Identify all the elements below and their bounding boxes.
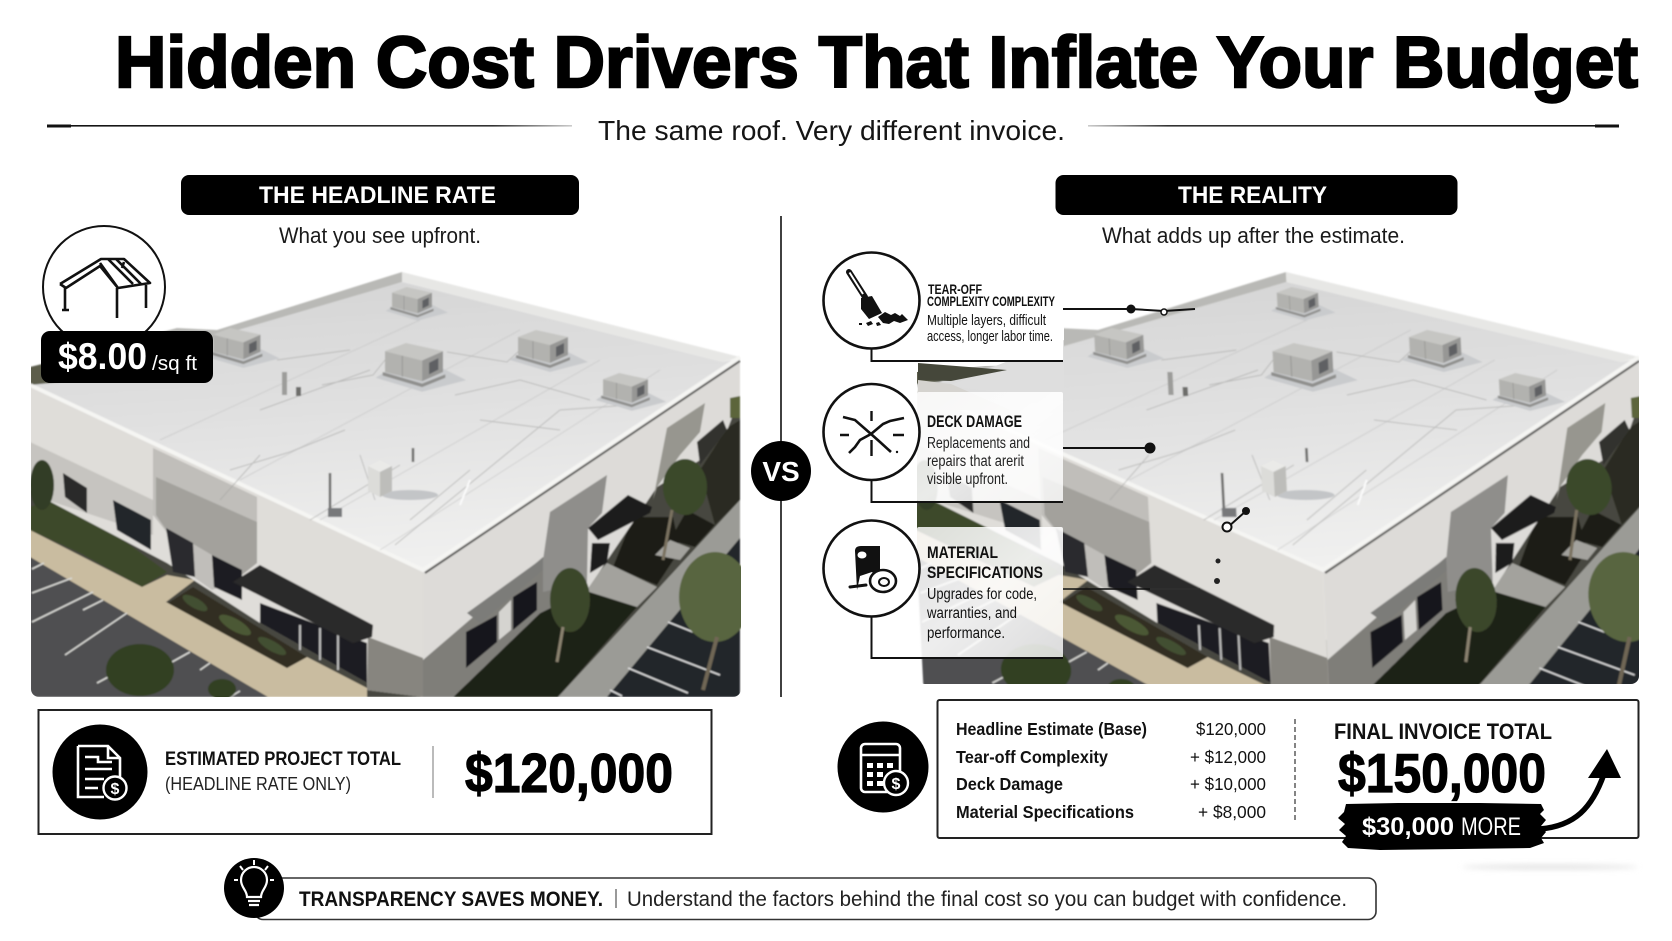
takeaway bar	[224, 858, 1376, 920]
price badge: $8.00 per sq ft	[41, 331, 213, 383]
text: material specifications: performance.	[927, 625, 1005, 642]
text: material specifications	[926, 543, 1043, 642]
text: deck damage: DECK DAMAGE	[927, 413, 1022, 431]
icon: invoice document	[52, 724, 148, 820]
cost breakdown table: Deck Damage	[956, 774, 1063, 794]
panel: the reality	[824, 175, 1668, 850]
heading pill: the headline rate: THE HEADLINE RATE	[259, 182, 496, 209]
cost breakdown table: $120,000	[1196, 719, 1266, 739]
summary box: estimated project total: ESTIMATED PROJECT TOTAL	[165, 748, 401, 770]
icon: invoice document: $	[111, 781, 120, 798]
heading pill: the reality	[1056, 175, 1458, 215]
badge: $30,000 more: $30,000	[1362, 813, 1454, 841]
summary box: estimated project total	[38, 710, 712, 834]
icon: calculator: $	[892, 776, 901, 793]
text: tear-off complexity: COMPLEXITY COMPLEXITY	[927, 293, 1055, 309]
text: tear-off complexity: Multiple layers, difficult	[927, 313, 1046, 329]
subtitle with rules: The same roof. Very different invoice.	[598, 115, 1065, 146]
cost breakdown table: Material Specifications	[956, 802, 1134, 822]
cost breakdown table: + $12,000	[1190, 747, 1266, 767]
cost breakdown table: Headline Estimate (Base)	[956, 719, 1147, 739]
cost breakdown table: + $8,000	[1198, 802, 1266, 822]
photo: building roof, headline side	[30, 272, 751, 699]
cost breakdown table	[956, 719, 1266, 822]
text: deck damage: visible upfront.	[927, 471, 1008, 488]
heading pill: the headline rate	[181, 175, 579, 215]
cost breakdown table: + $10,000	[1190, 774, 1266, 794]
text: tear-off complexity: access, longer labor time.	[927, 329, 1053, 345]
versus divider: VS	[762, 456, 800, 487]
text: material specifications: SPECIFICATIONS	[927, 563, 1043, 582]
caption: what adds up: What adds up after the estimate.	[1102, 223, 1405, 248]
callout: deck damage	[824, 384, 1156, 502]
faint smudge	[1462, 865, 1638, 869]
price badge: $8.00 per sq ft: $8.00	[58, 336, 147, 377]
arrow up	[1540, 749, 1621, 829]
panel: the headline rate	[30, 175, 751, 834]
caption: what you see upfront: What you see upfront.	[279, 223, 481, 248]
summary box: final invoice: FINAL INVOICE TOTAL	[1334, 719, 1552, 744]
photo: building roof, reality side	[902, 272, 1668, 699]
takeaway bar: Understand the factors behind the final cost so you can budget with confidence.	[627, 888, 1347, 911]
cost breakdown table: Tear-off Complexity	[956, 747, 1108, 767]
subtitle with rules	[47, 115, 1619, 146]
versus divider	[751, 216, 811, 697]
callout: tear-off complexity	[824, 252, 1195, 361]
price badge: $8.00 per sq ft: /sq ft	[152, 353, 197, 375]
text: deck damage	[927, 413, 1030, 488]
summary box: final invoice	[938, 700, 1638, 850]
heading pill: the reality: THE REALITY	[1178, 182, 1327, 209]
text: material specifications: Upgrades for code,	[927, 586, 1037, 603]
icon: shovel in circle	[824, 252, 920, 348]
callout markers on roof	[1214, 507, 1250, 584]
icon: roof in circle	[43, 226, 165, 348]
text: material specifications: warranties, and	[926, 605, 1017, 622]
summary box: estimated project total: (HEADLINE RATE ONLY)	[165, 773, 351, 794]
summary box: estimated project total: $120,000	[465, 742, 673, 804]
badge: $30,000 more	[1338, 803, 1546, 850]
summary box: final invoice: $150,000	[1338, 742, 1546, 804]
icon: light bulb	[224, 858, 284, 918]
title: Hidden Cost Drivers That Inflate Your Budget	[115, 23, 1638, 103]
icon: calculator	[838, 722, 928, 812]
icon: cracked deck in circle	[824, 384, 920, 480]
callout: material specifications	[824, 520, 1200, 658]
takeaway bar: TRANSPARENCY SAVES MONEY.	[299, 888, 603, 911]
text: tear-off complexity	[927, 281, 1055, 345]
text: tear-off complexity: TEAR-OFF	[928, 281, 982, 297]
badge: $30,000 more: MORE	[1461, 813, 1521, 841]
text: deck damage: repairs that arerit	[927, 453, 1025, 470]
text: deck damage: Replacements and	[927, 435, 1030, 452]
icon: material roll in circle	[824, 520, 920, 616]
text: material specifications: MATERIAL	[927, 543, 998, 562]
